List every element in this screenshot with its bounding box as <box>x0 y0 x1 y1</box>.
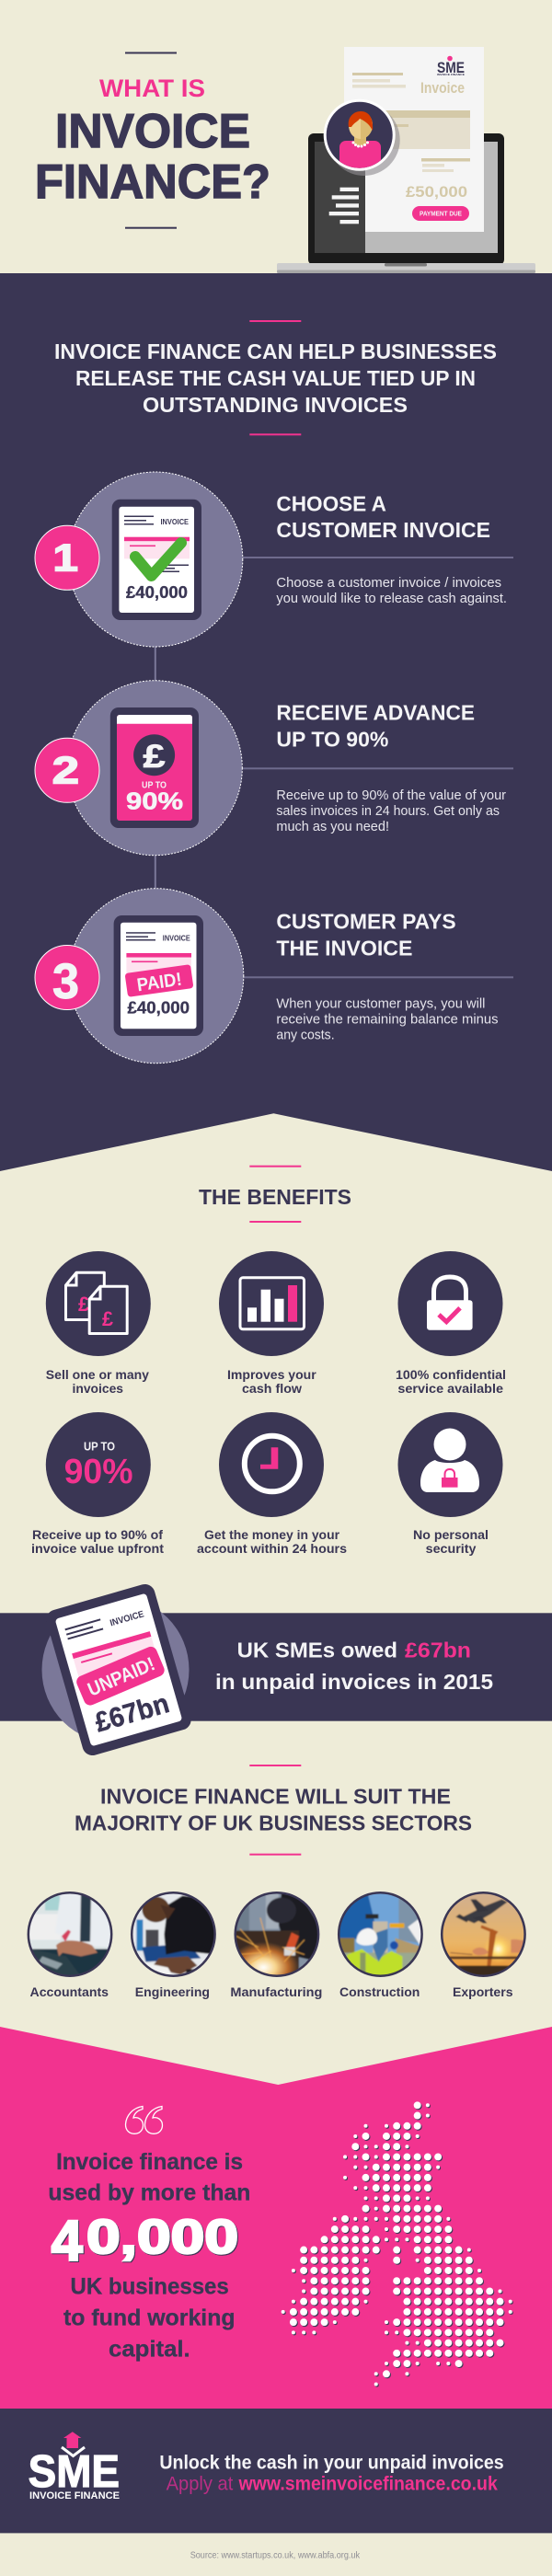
header title: INVOICE <box>55 105 250 158</box>
sector: engineering <box>131 1892 215 1999</box>
invoice paper: £50,000 <box>406 183 467 201</box>
benefit: no personal security: No personal <box>413 1528 489 1542</box>
step 1 text <box>276 491 507 606</box>
step 3 text: THE INVOICE <box>276 936 412 960</box>
accountants photo <box>28 1892 112 1976</box>
band text: £67bn <box>405 1639 471 1662</box>
step 3 number badge: 3 <box>52 954 79 1009</box>
step 2 tablet icon: UP TO <box>142 780 167 791</box>
section heading: invoice finance can help: RELEASE THE CASH VALUE TIED UP IN <box>75 366 476 390</box>
statistic quote text <box>48 2149 250 2363</box>
invoice paper: Invoice <box>420 80 465 97</box>
statistic quote text: 0,000 <box>86 2211 238 2264</box>
step 2 text: much as you need! <box>276 820 389 834</box>
sector: manufacturing: Manufacturing <box>230 1985 322 1999</box>
menu lines <box>329 188 359 224</box>
sector: accountants: Accountants <box>29 1985 109 1999</box>
call to action text <box>159 2452 504 2495</box>
engineering photo <box>131 1892 215 1976</box>
step 3 tablet icon: PAID! <box>135 970 183 995</box>
exporters photo <box>441 1892 525 1976</box>
benefit: sell one or many invoices: £ <box>78 1293 90 1316</box>
benefit: sell one or many invoices: £ <box>102 1307 114 1330</box>
manufacturing photo <box>235 1892 319 1976</box>
unpaid tablet icon <box>44 1581 193 1758</box>
UK dot map <box>283 2105 511 2385</box>
invoice paper: PAYMENT DUE <box>420 212 462 217</box>
benefit: sell one or many invoices <box>46 1251 151 1396</box>
step 2 text <box>276 701 506 834</box>
statistic quote text: Invoice finance is <box>56 2149 243 2175</box>
step 1 text: you would like to release cash against. <box>276 592 507 606</box>
section heading: invoice finance can help <box>54 320 497 435</box>
SME logo: SME <box>29 2447 120 2497</box>
benefit: improves your cash flow: cash flow <box>242 1382 303 1396</box>
connector lines between steps <box>155 647 156 889</box>
sector: manufacturing <box>230 1892 322 1999</box>
benefits heading: THE BENEFITS <box>199 1185 351 1209</box>
unpaid tablet icon: £67bn <box>92 1688 173 1738</box>
step 1 tablet icon: £40,000 <box>126 583 188 602</box>
benefit: up to 90%: invoice value upfront <box>31 1542 165 1556</box>
step 3 <box>35 889 513 1064</box>
step 3 text: receive the remaining balance minus <box>276 1013 499 1028</box>
step 2 tablet icon: 90% <box>126 787 183 814</box>
step 1 text: Choose a customer invoice / invoices <box>276 576 501 591</box>
step 3 text <box>276 909 499 1043</box>
invoice paper: SME <box>437 60 465 76</box>
benefit: sell one or many invoices: invoices <box>72 1382 123 1396</box>
step 1 number badge <box>35 525 99 590</box>
benefit: up to 90%: UP TO <box>84 1440 115 1454</box>
footer bar background <box>0 2409 552 2533</box>
sector: engineering: Engineering <box>135 1985 210 1999</box>
statistic quote text: used by more than <box>48 2180 250 2206</box>
benefit: sell one or many invoices: Sell one or many <box>46 1368 149 1382</box>
avatar <box>324 99 400 176</box>
benefit: up to 90% <box>31 1412 165 1556</box>
statistic quote text: capital. <box>109 2337 190 2363</box>
benefit: confidential service: 100% confidential <box>396 1368 506 1382</box>
call to action text: www.smeinvoicefinance.co.uk <box>238 2474 498 2495</box>
step 3 text: CUSTOMER PAYS <box>276 909 456 933</box>
laptop with invoice illustration <box>277 47 535 273</box>
step 1 <box>35 472 513 647</box>
step 1 rule <box>243 557 513 558</box>
statistic quote text: 4 <box>52 2210 83 2272</box>
benefit: up to 90%: Receive up to 90% of <box>32 1528 164 1542</box>
quote mark icon <box>125 2107 162 2133</box>
sector: exporters: Exporters <box>453 1985 513 1999</box>
band text: UK SMEs owed <box>237 1639 397 1662</box>
sector: construction <box>338 1892 422 1999</box>
step 2 text: Receive up to 90% of the value of your <box>276 788 506 803</box>
sectors heading: INVOICE FINANCE WILL SUIT THE <box>100 1785 451 1809</box>
band background <box>0 1613 552 1721</box>
benefit: money within 24 hours <box>197 1412 347 1556</box>
invoice paper: INVOICE FINANCE <box>437 73 465 76</box>
step 3 tablet icon: INVOICE <box>163 934 190 942</box>
header title: WHAT IS <box>99 75 205 102</box>
SME logo <box>29 2432 120 2501</box>
unpaid tablet icon: INVOICE <box>109 1609 145 1628</box>
step 2 circle <box>67 681 242 856</box>
step 3 number badge <box>35 946 99 1010</box>
section heading: invoice finance can help: OUTSTANDING INVOICES <box>143 393 408 417</box>
sectors heading: MAJORITY OF UK BUSINESS SECTORS <box>75 1811 472 1834</box>
statistic quote text: to fund working <box>63 2306 236 2331</box>
pink statistic section background <box>0 2027 552 2409</box>
source note: Source: www.startups.co.uk, www.abfa.org.uk <box>190 2550 361 2561</box>
section heading: invoice finance can help: INVOICE FINANCE CAN HELP BUSINESSES <box>54 339 497 363</box>
step 1 number badge: 1 <box>52 536 78 580</box>
dark process section background <box>0 273 552 1171</box>
laptop body <box>277 133 535 273</box>
benefit: no personal security: security <box>426 1542 477 1556</box>
benefit: confidential service: service available <box>397 1382 504 1396</box>
benefit: no personal security <box>397 1412 502 1556</box>
call to action text: Apply at <box>167 2474 233 2495</box>
band circle <box>42 1596 190 1743</box>
benefit: money within 24 hours: account within 24 hours <box>197 1542 347 1556</box>
step 2 <box>35 681 513 856</box>
step 1 text: CHOOSE A <box>276 491 386 515</box>
header title: FINANCE? <box>35 155 270 209</box>
benefit: improves your cash flow <box>219 1251 324 1396</box>
benefit: improves your cash flow: Improves your <box>227 1368 316 1382</box>
benefit: money within 24 hours: Get the money in your <box>204 1528 340 1542</box>
construction photo <box>338 1892 422 1976</box>
statistic quote text: UK businesses <box>70 2274 229 2300</box>
header title <box>35 52 270 229</box>
step 3 rule <box>244 976 513 978</box>
step 1 text: CUSTOMER INVOICE <box>276 518 490 542</box>
step 2 rule <box>242 767 513 769</box>
invoice paper <box>344 47 484 232</box>
step 3 circle <box>69 889 244 1064</box>
unpaid tablet icon: UNPAID! <box>85 1653 158 1701</box>
step 2 tablet icon: £ <box>144 739 166 775</box>
step 3 tablet icon: £40,000 <box>127 998 190 1017</box>
step 3 tablet icon <box>114 915 203 1036</box>
step 1 tablet icon: INVOICE <box>160 518 190 526</box>
band text: in unpaid invoices in 2015 <box>215 1670 493 1694</box>
laptop side panel <box>315 142 365 253</box>
unpaid invoices band <box>0 1581 552 1758</box>
step 3 text: any costs. <box>276 1029 335 1043</box>
step 2 text: RECEIVE ADVANCE <box>276 701 475 725</box>
step 2 number badge: 2 <box>52 749 79 792</box>
benefit: confidential service <box>396 1251 506 1396</box>
band text <box>215 1639 493 1694</box>
sector: construction: Construction <box>339 1985 420 1999</box>
step 2 text: UP TO 90% <box>276 728 388 752</box>
step 1 tablet icon <box>112 500 201 620</box>
sector: accountants <box>28 1892 112 1999</box>
step 3 text: When your customer pays, you will <box>276 997 485 1012</box>
step 2 text: sales invoices in 24 hours. Get only as <box>276 804 500 819</box>
call to action text: Unlock the cash in your unpaid invoices <box>159 2452 504 2473</box>
sectors heading <box>75 1765 472 1856</box>
sector: exporters <box>441 1892 525 1999</box>
step 2 number badge <box>35 738 99 802</box>
SME logo: INVOICE FINANCE <box>29 2490 120 2501</box>
benefit: up to 90%: 90% <box>64 1453 133 1491</box>
step 1 circle <box>68 472 243 647</box>
step 2 tablet icon <box>110 707 199 828</box>
